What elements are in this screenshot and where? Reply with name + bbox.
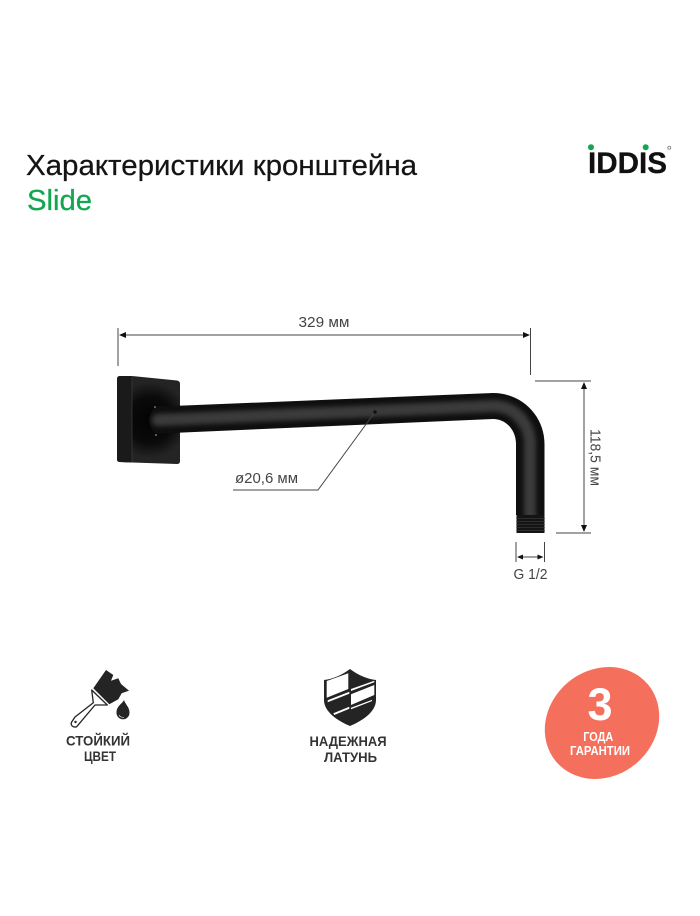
dimension: thread G 1/2: G 1/2 <box>514 567 548 583</box>
dimension: height 118,5 mm <box>535 381 602 533</box>
arm tube <box>150 393 544 515</box>
logo: IDDIS: IDDIS <box>588 147 667 180</box>
label: durable colour: СТОЙКИЙ <box>66 732 130 748</box>
subtitle: model name: Slide <box>27 185 92 217</box>
dimension: width 329 mm: 329 мм <box>298 315 350 331</box>
dimension: thread G 1/2 <box>514 542 548 583</box>
dimension: diameter 20,6 mm: ø20,6 мм <box>235 471 298 487</box>
badge: 3-year warranty: ГАРАНТИИ <box>570 744 630 758</box>
title: Характеристики кронштейна <box>26 150 417 182</box>
threaded end <box>516 515 545 533</box>
label: durable colour: ЦВЕТ <box>84 748 116 764</box>
label: reliable brass: НАДЕЖНАЯ <box>310 733 387 749</box>
wall plate <box>117 376 180 464</box>
badge: 3-year warranty <box>522 644 682 802</box>
dimension: height 118,5 mm: 118,5 мм <box>586 429 602 486</box>
dimension: diameter 20,6 mm <box>233 410 377 490</box>
badge: 3-year warranty: 3 <box>587 679 613 730</box>
feature: durable colour <box>66 670 134 764</box>
icon: shield <box>324 669 376 726</box>
product: shower arm bracket <box>117 376 545 533</box>
badge: 3-year warranty: ГОДА <box>583 730 613 744</box>
feature: reliable brass <box>310 669 390 765</box>
dimension: width 329 mm <box>118 315 530 375</box>
label: reliable brass: ЛАТУНЬ <box>324 749 377 765</box>
icon: paint brush and drop <box>71 670 130 727</box>
